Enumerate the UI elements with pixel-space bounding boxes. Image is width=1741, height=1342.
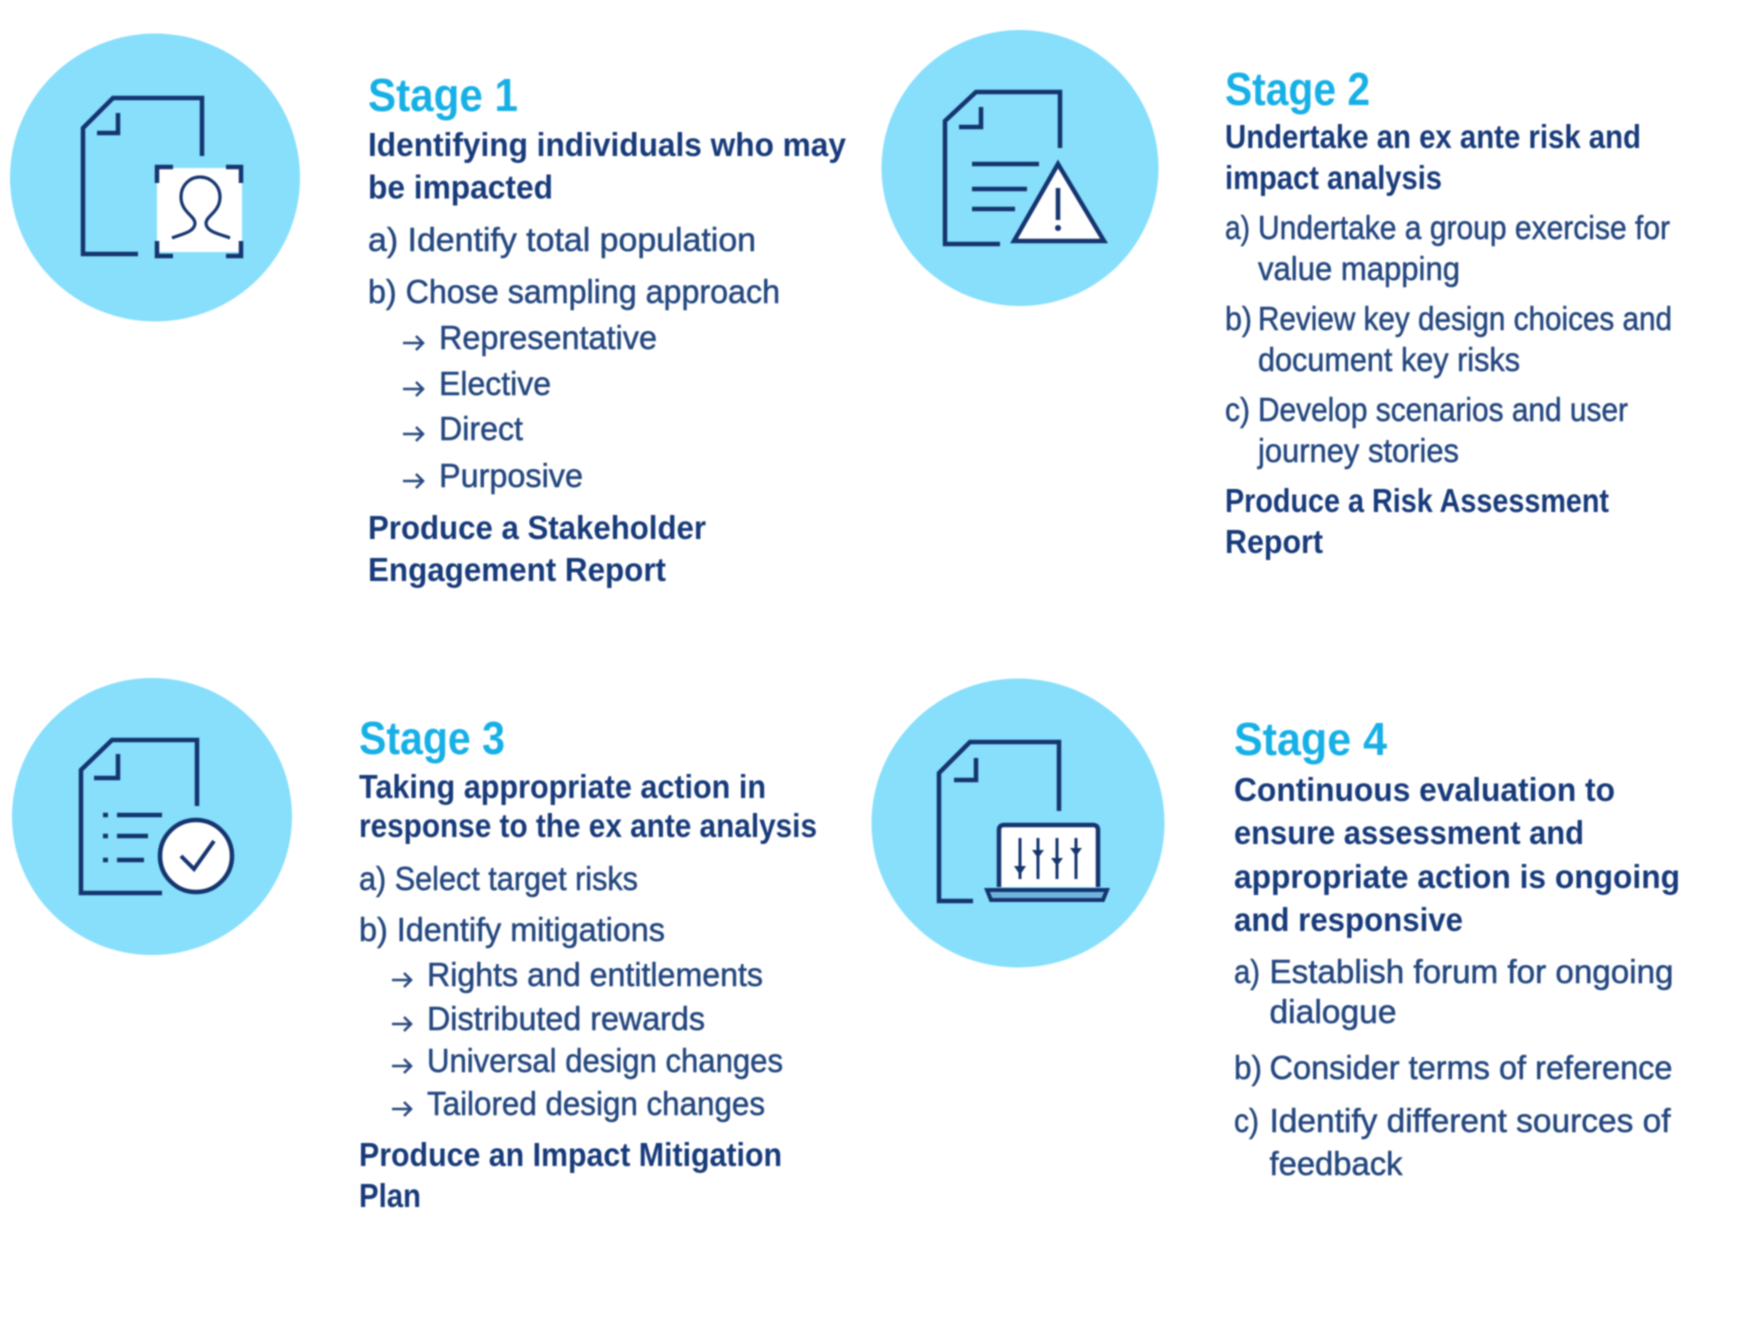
text block: steps: b) Identify mitigations [359, 911, 665, 948]
text block: steps: document key risks [1258, 341, 1520, 378]
output: impact mitigation plan: Plan [359, 1177, 421, 1214]
text block: steps: b) [1225, 300, 1252, 337]
text block: steps: b) [1234, 1049, 1262, 1086]
list: sampling options: Purposive [439, 457, 583, 494]
panel: stage 1 [10, 34, 847, 588]
text block: steps: value mapping [1258, 250, 1460, 287]
subheading: appropriate action is ongoing [1234, 858, 1680, 895]
output: impact mitigation plan: Produce an Impact Mitigation [359, 1136, 782, 1173]
heading: Stage 3: Stage 3 [359, 712, 505, 764]
panel: stage 4 [872, 678, 1680, 1182]
subheading: response to the ex ante analysis [359, 807, 817, 844]
subheading: Continuous evaluation to [1234, 771, 1615, 808]
text block: steps: a) Identify total population [368, 221, 756, 258]
subheading [359, 768, 817, 844]
subheading [1225, 118, 1641, 196]
text block: steps: a) [1234, 953, 1260, 990]
subheading: Taking appropriate action in [359, 768, 766, 805]
text block: steps: journey stories [1257, 432, 1459, 469]
subheading: impact analysis [1225, 159, 1442, 196]
subheading [1234, 771, 1680, 938]
text block: steps: a) Select target risks [359, 860, 638, 897]
subheading: ensure assessment and [1234, 814, 1584, 851]
text block: steps: dialogue [1270, 993, 1396, 1030]
list: mitigation options [392, 956, 783, 1122]
text block: steps: a) [1225, 209, 1250, 246]
output: risk assessment report: Produce a Risk Assessment [1225, 482, 1609, 519]
icon: document with laptop and sliders [872, 678, 1164, 968]
text block: steps: b) Chose sampling approach [368, 273, 780, 310]
text block: steps: feedback [1270, 1145, 1403, 1182]
list: mitigation options: Tailored design changes [427, 1085, 765, 1122]
list: sampling options: Representative [439, 319, 657, 356]
subheading: Undertake an ex ante risk and [1225, 118, 1641, 155]
output: risk assessment report [1225, 482, 1609, 560]
output: risk assessment report: Report [1225, 523, 1323, 560]
panel: stage 3 [12, 678, 817, 1214]
icon: document with person in viewfinder [10, 34, 300, 322]
text block: steps: c) [1225, 391, 1250, 428]
text block: steps: Establish forum for ongoing [1270, 953, 1674, 990]
subheading [368, 126, 847, 206]
text block: steps: Consider terms of reference [1270, 1049, 1672, 1086]
list: mitigation options: Distributed rewards [427, 1000, 705, 1037]
text block: steps [368, 221, 780, 310]
output: stakeholder report: Produce a Stakeholder [368, 509, 706, 546]
text block: steps [1225, 209, 1672, 469]
text block: steps: c) [1234, 1102, 1259, 1139]
list: mitigation options: Rights and entitlements [427, 956, 763, 993]
list: sampling options [403, 319, 657, 494]
panel: stage 2 [882, 30, 1672, 560]
output: stakeholder report: Engagement Report [368, 551, 666, 588]
heading: Stage 4: Stage 4 [1234, 713, 1387, 765]
output: stakeholder report [368, 509, 706, 588]
output: impact mitigation plan [359, 1136, 782, 1214]
subheading: be impacted [368, 168, 553, 206]
text block: steps [1234, 953, 1674, 1182]
list: sampling options: Elective [439, 365, 551, 402]
text block: steps: Develop scenarios and user [1258, 391, 1628, 428]
text block: steps: Identify different sources of [1270, 1102, 1671, 1139]
list: mitigation options: Universal design changes [427, 1042, 783, 1079]
subheading: Identifying individuals who may [368, 126, 847, 163]
icon: document with warning triangle [882, 30, 1158, 306]
icon: document with check mark [12, 678, 292, 955]
list: sampling options: Direct [439, 410, 523, 447]
heading: Stage 2: Stage 2 [1225, 63, 1370, 115]
text block: steps [359, 860, 665, 948]
subheading: and responsive [1234, 901, 1463, 938]
text block: steps: Review key design choices and [1258, 300, 1672, 337]
text block: steps: Undertake a group exercise for [1258, 209, 1670, 246]
heading: Stage 1: Stage 1 [368, 69, 518, 121]
